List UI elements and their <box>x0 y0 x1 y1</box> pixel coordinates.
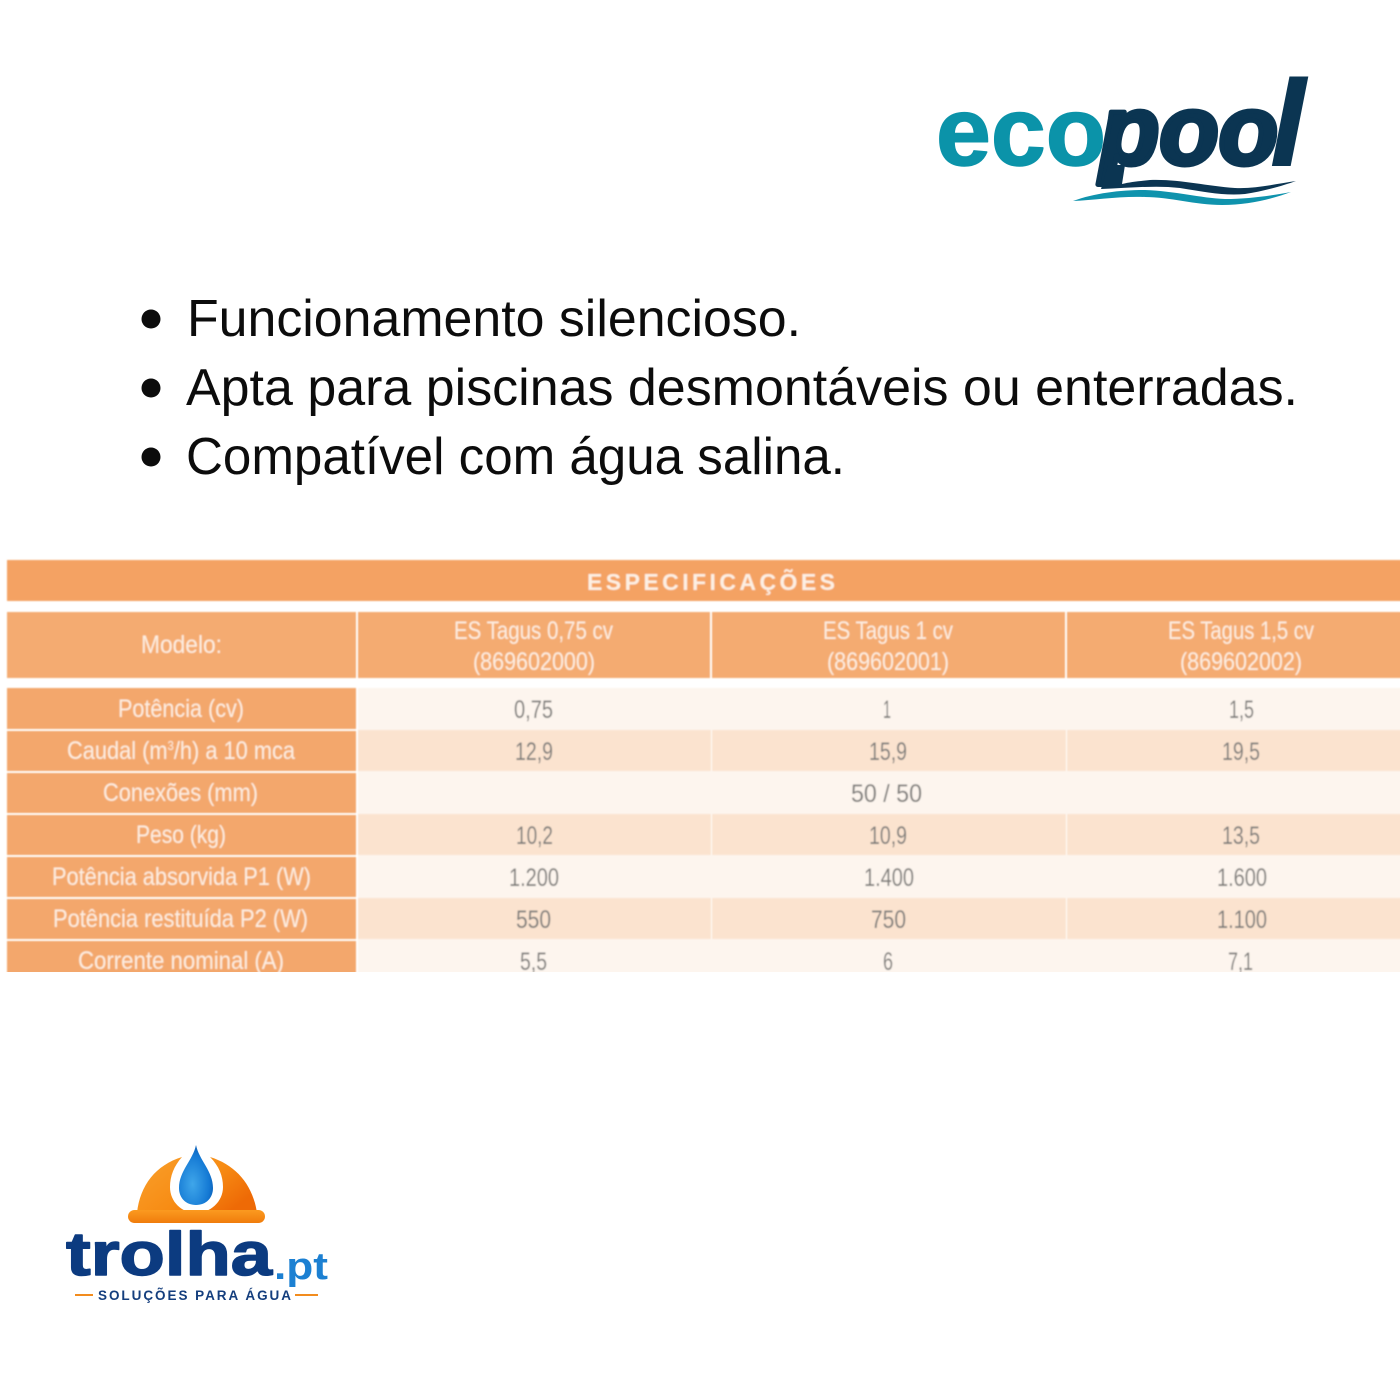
row: Caudal <box>7 730 1400 771</box>
row: Potência (cv) <box>7 688 1400 730</box>
logo word: l: l <box>1271 55 1307 191</box>
logo word: eco: eco <box>936 77 1106 186</box>
row: Potência restituída: 550 <box>516 906 551 934</box>
row: Peso <box>7 814 1400 855</box>
bullet 1: Funcionamento silencioso. <box>187 290 801 348</box>
row: Caudal: /h) a 10 mca <box>174 737 295 765</box>
row: Corrente nominal: 6 <box>883 948 893 976</box>
table header row <box>7 612 1400 678</box>
row: Corrente nominal: Corrente nominal (A) <box>78 947 284 975</box>
table title bar: ESPECIFICAÇÕES <box>587 568 835 595</box>
row: Potência restituída: 1.100 <box>1217 906 1267 934</box>
table header row: ES Tagus 1,5 cv <box>1168 617 1314 645</box>
row: Potência absorvida: 1.400 <box>864 864 914 892</box>
row: Potência absorvida <box>7 855 1400 898</box>
row: Corrente nominal <box>6 939 1400 972</box>
row: Caudal: 12,9 <box>515 738 553 766</box>
row: Peso: 10,2 <box>516 822 553 850</box>
ecopool logo <box>936 55 1307 205</box>
row: Potência absorvida: Potência absorvida P1 (W) <box>52 863 311 891</box>
trolha.pt logo <box>66 1145 328 1303</box>
row: Potência (cv): 1 <box>883 696 891 724</box>
logo word: poo: poo <box>1097 75 1278 185</box>
table title bar <box>7 560 1400 601</box>
row: Potência absorvida: 1.600 <box>1217 864 1267 892</box>
row: Potência restituída: 750 <box>871 906 906 934</box>
row: Potência restituída <box>7 898 1400 939</box>
logo wave: teal <box>1073 190 1291 205</box>
logo wave: dark <box>1101 165 1296 195</box>
row: Conexões: Conexões (mm) <box>103 779 258 807</box>
table header row: ES Tagus 1 cv <box>823 617 953 645</box>
icon: water drop <box>179 1145 213 1205</box>
row: Potência absorvida: 1.200 <box>509 864 559 892</box>
table header row: (869602002) <box>1180 648 1302 676</box>
row: Potência (cv): 1,5 <box>1229 696 1254 724</box>
row: Caudal: 3 <box>168 738 174 753</box>
row: Caudal: 15,9 <box>869 738 907 766</box>
row: Corrente nominal: 7,1 <box>1228 948 1253 976</box>
table header row: Modelo: <box>141 631 222 659</box>
table header row: (869602000) <box>473 648 595 676</box>
icon: hard hat with water drop <box>128 1145 265 1223</box>
wordmark: trolha: trolha <box>66 1220 273 1288</box>
feature bullet list <box>142 290 1298 486</box>
table header row: ES Tagus 0,75 cv <box>454 617 613 645</box>
bullet 3: Compatível com água salina. <box>186 428 845 486</box>
row: Potência (cv): Potência (cv) <box>118 695 244 723</box>
bullet 2: Apta para piscinas desmontáveis ou enterradas. <box>186 359 1298 417</box>
specifications table <box>7 560 1400 981</box>
row: Potência (cv): 0,75 <box>514 696 553 724</box>
wordmark: .pt: .pt <box>274 1246 328 1288</box>
row: Conexões: 50 / 50 <box>851 780 922 808</box>
row: Peso: 10,9 <box>869 822 907 850</box>
row: Caudal: 19,5 <box>1222 738 1260 766</box>
row: Peso: Peso (kg) <box>136 821 226 849</box>
row: Corrente nominal: 5,5 <box>520 948 547 976</box>
row: Peso: 13,5 <box>1222 822 1260 850</box>
row: Conexões <box>7 771 1400 814</box>
table header row: (869602001) <box>827 648 949 676</box>
tagline with orange rules: SOLUÇÕES PARA ÁGUA <box>98 1288 291 1303</box>
row: Potência restituída: Potência restituída P2 (W) <box>53 905 308 933</box>
row: Caudal: Caudal (m <box>67 737 182 765</box>
